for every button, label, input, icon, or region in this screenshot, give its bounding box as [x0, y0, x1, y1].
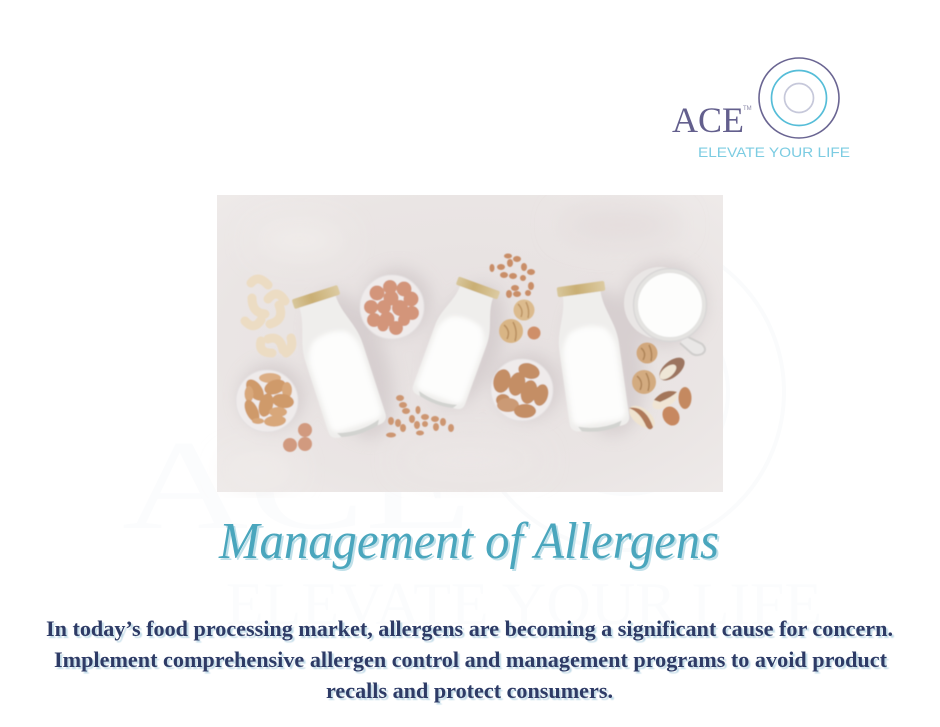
body line 2: Implement comprehensive allergen control and management programs to avoid product — [54, 647, 888, 672]
background watermark logo: ELEVATE YOUR LIFE — [226, 571, 822, 637]
bottle: middle — [410, 275, 505, 413]
nuts: three hazelnuts — [283, 423, 312, 452]
nuts: peanuts and walnuts upper — [490, 254, 540, 343]
logo tagline: ELEVATE YOUR LIFE — [698, 144, 850, 160]
body text — [46, 616, 893, 703]
nuts: walnuts and brazil nuts — [625, 342, 692, 433]
background watermark logo: ACE — [122, 414, 472, 556]
body line 3: recalls and protect consumers. — [326, 678, 613, 703]
title: Management of Allergens — [218, 513, 719, 570]
nuts: peanuts lower — [386, 395, 454, 438]
mottled surface — [225, 209, 680, 484]
bowl: hazelnuts — [360, 275, 424, 339]
background watermark logo — [122, 234, 822, 637]
bowl: pecans — [491, 359, 553, 421]
glass of milk — [624, 267, 706, 355]
photo: milk bottles and nuts — [217, 195, 723, 492]
bottle: left — [286, 283, 389, 443]
logo wordmark: ACE — [672, 100, 744, 140]
body line 1: In today’s food processing market, allergens are becoming a significant cause for concern. — [46, 616, 893, 641]
icon: concentric circles — [759, 58, 839, 138]
bowl: almonds — [236, 370, 298, 432]
logo: ACE Elevate Your Life — [672, 58, 850, 160]
trademark: TM — [743, 106, 752, 112]
nuts: cashews — [245, 279, 292, 353]
bottle: right — [551, 280, 631, 435]
shadows — [239, 262, 706, 448]
